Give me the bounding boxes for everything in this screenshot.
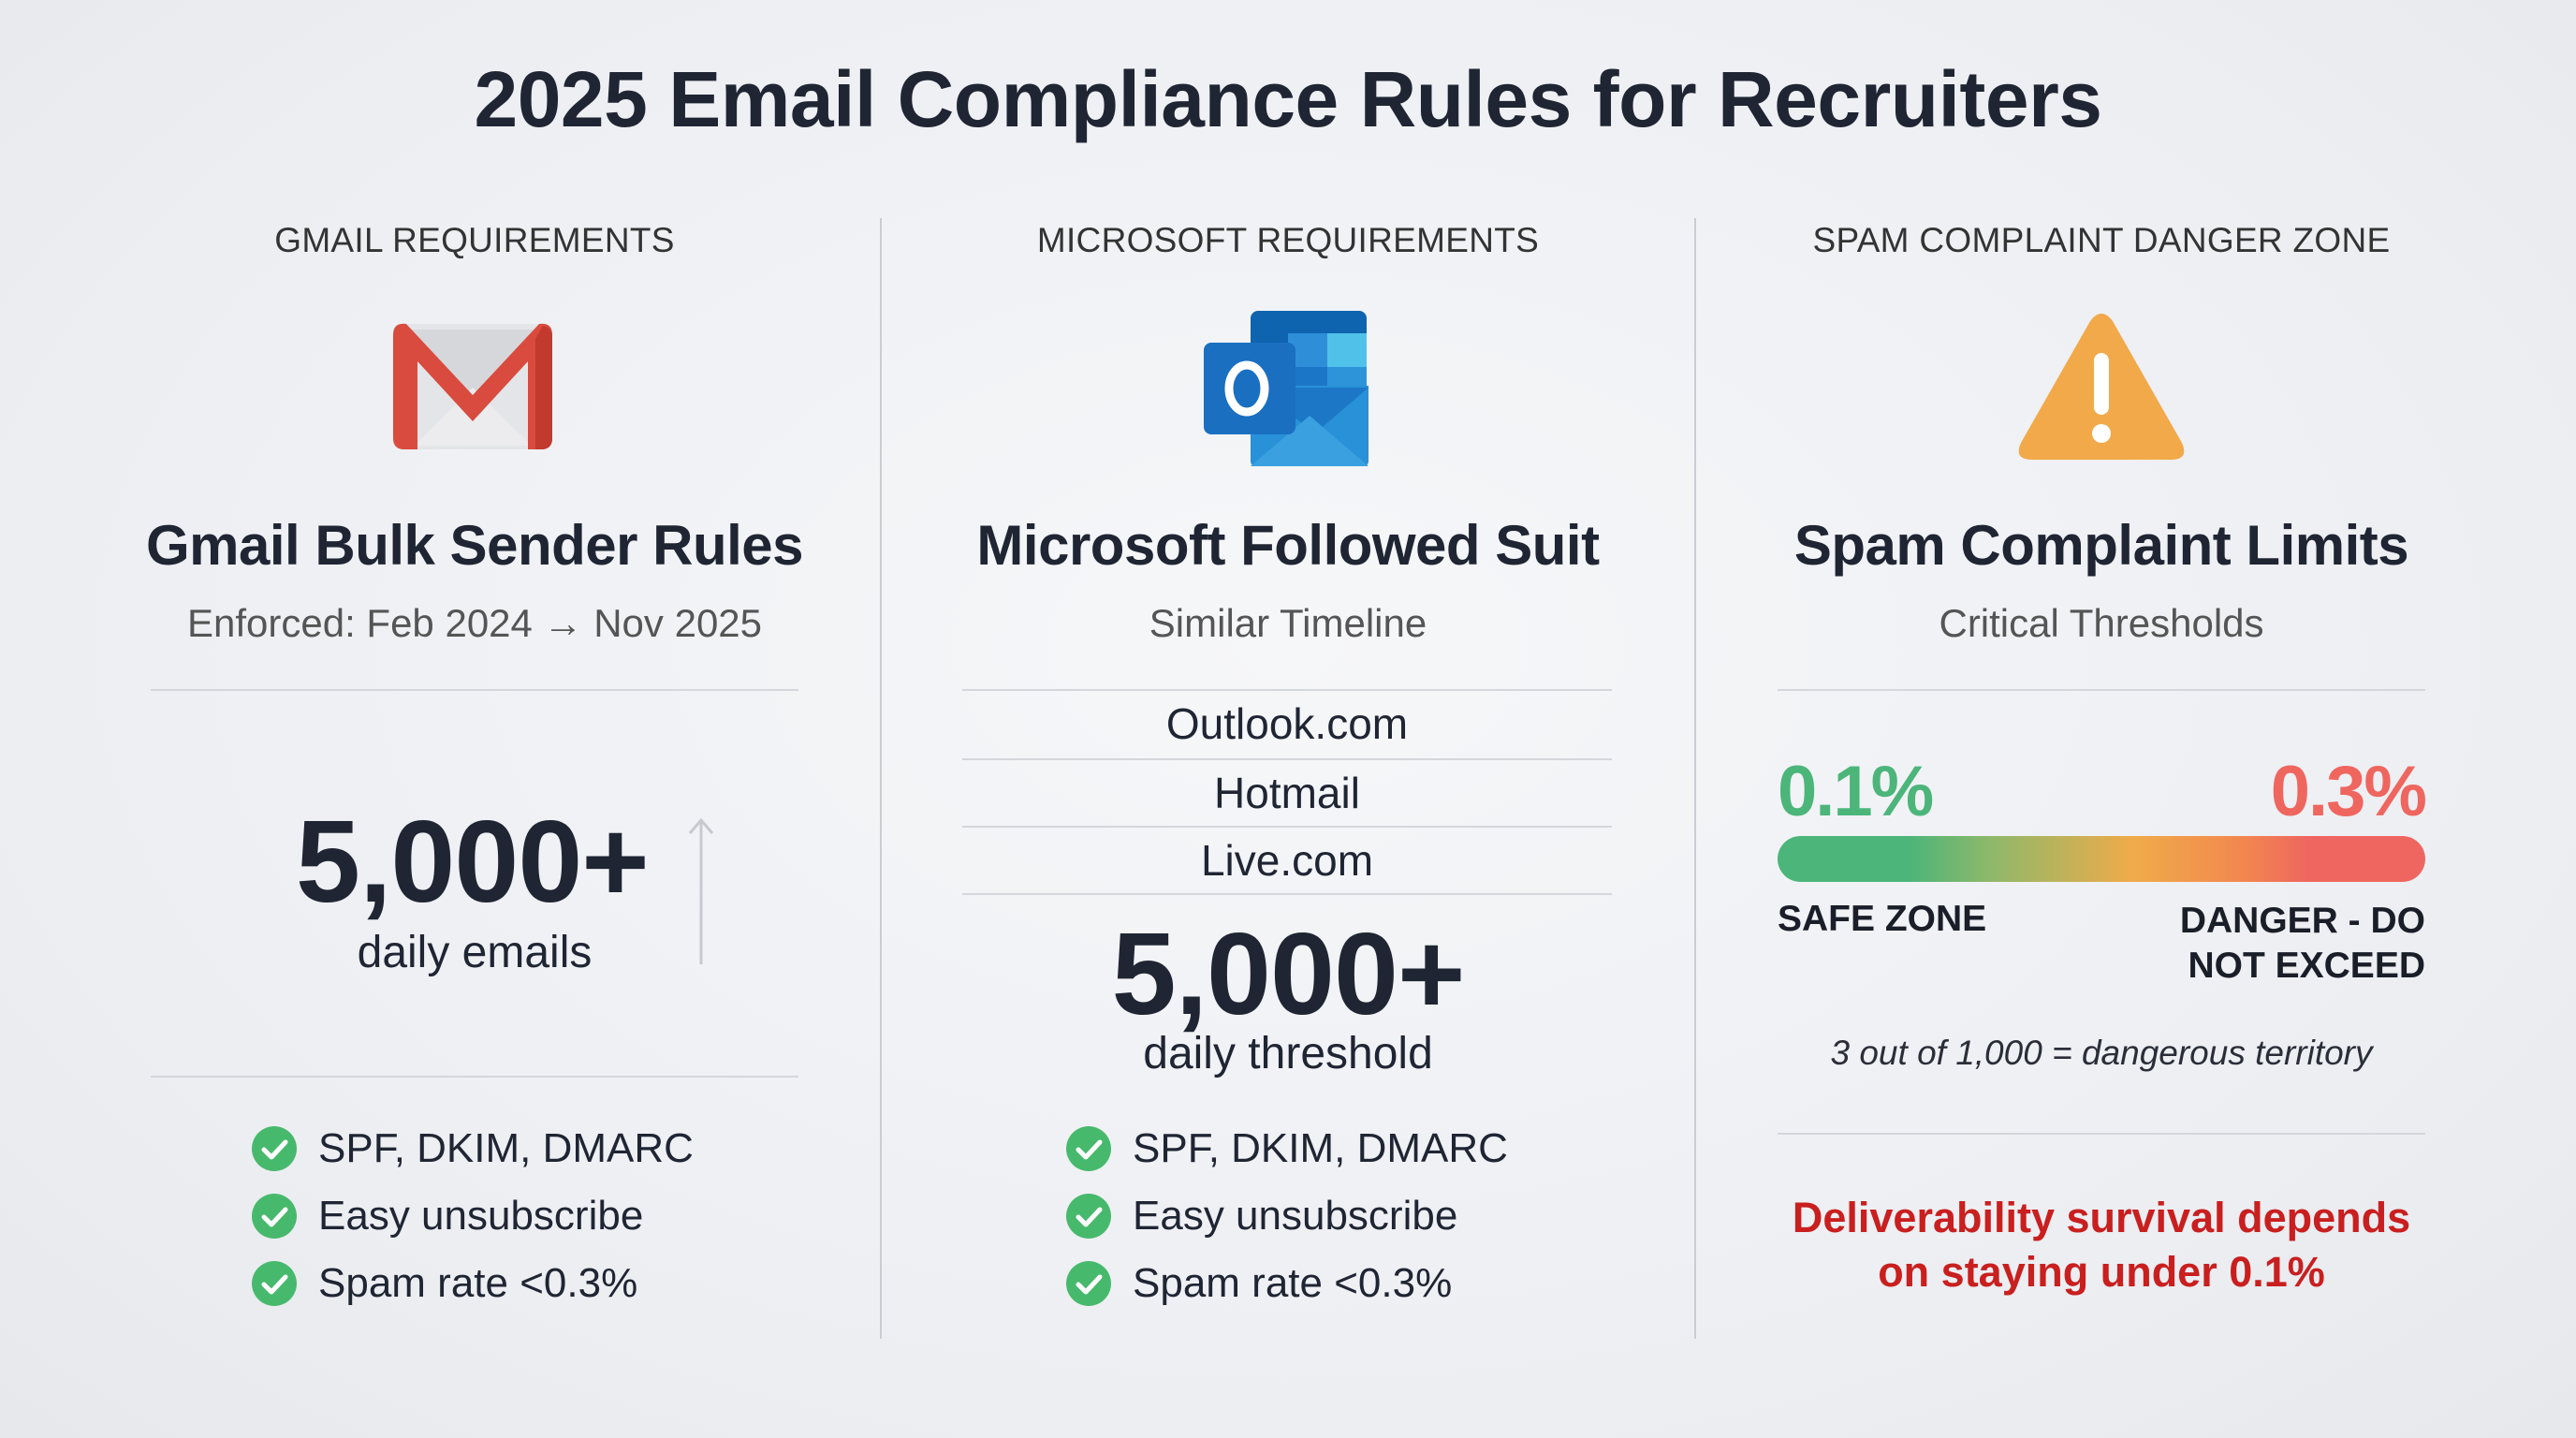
note: dangerous territory: 3 out of 1,000 = dangerous territory — [1830, 1034, 2373, 1072]
panel: microsoft — [962, 221, 1612, 1306]
stat: 5000+ daily threshold: daily threshold — [1143, 1029, 1433, 1078]
stat: 5000+ daily threshold: 5,000+ — [1112, 910, 1464, 1039]
panel: spam danger zone — [1778, 221, 2425, 1296]
subheading: gmail: Enforced: Feb 2024 → Nov 2025 — [187, 601, 762, 645]
icon: warning — [2018, 314, 2185, 460]
gauge: threshold bar: 0.3% — [2271, 752, 2425, 831]
divider: left — [880, 218, 882, 1339]
list: domains: Live.com — [1201, 836, 1373, 885]
gauge: threshold bar: 0.1% — [1778, 752, 1932, 831]
checklist: gmail: Spam rate <0.3% — [318, 1260, 637, 1306]
subheading: microsoft: Similar Timeline — [1149, 601, 1427, 645]
callout: deliverability: on staying under 0.1% — [1878, 1248, 2325, 1296]
gauge: threshold bar: NOT EXCEED — [2188, 946, 2425, 986]
section label: microsoft: MICROSOFT REQUIREMENTS — [1037, 221, 1539, 259]
title: 2025 Email Compliance Rules for Recruiters — [474, 55, 2102, 143]
checklist: gmail: Easy unsubscribe — [318, 1193, 643, 1239]
stat: 5000+ daily emails: 5,000+ — [296, 798, 649, 927]
list: domains — [962, 689, 1612, 895]
checklist: gmail: SPF, DKIM, DMARC — [318, 1125, 694, 1171]
divider: right — [1694, 218, 1696, 1339]
checklist: microsoft: SPF, DKIM, DMARC — [1133, 1125, 1508, 1171]
heading: spam: Spam Complaint Limits — [1794, 514, 2408, 577]
callout: deliverability: Deliverability survival depends — [1793, 1194, 2410, 1241]
subheading: spam: Critical Thresholds — [1939, 601, 2264, 645]
gauge: threshold bar: SAFE ZONE — [1778, 899, 1986, 939]
list: domains: Hotmail — [1214, 769, 1360, 817]
icon: gmail — [393, 324, 552, 449]
gauge: threshold bar — [1778, 752, 2425, 986]
stat: 5000+ daily emails: daily emails — [358, 928, 592, 977]
section label: spam: SPAM COMPLAINT DANGER ZONE — [1812, 221, 2391, 259]
icon: outlook — [1204, 311, 1368, 466]
section label: gmail: GMAIL REQUIREMENTS — [274, 221, 675, 259]
gauge: threshold bar: DANGER - DO — [2180, 901, 2425, 941]
panel: gmail — [146, 221, 803, 1306]
icon: up arrow — [689, 818, 713, 964]
heading: microsoft: Microsoft Followed Suit — [976, 514, 1600, 577]
callout: deliverability — [1793, 1194, 2410, 1296]
heading: gmail: Gmail Bulk Sender Rules — [146, 514, 803, 577]
checklist: gmail — [252, 1125, 694, 1306]
checklist: microsoft: Spam rate <0.3% — [1133, 1260, 1452, 1306]
checklist: microsoft — [1066, 1125, 1508, 1306]
stat: 5000+ daily emails — [296, 798, 713, 977]
list: domains: Outlook.com — [1166, 699, 1408, 748]
checklist: microsoft: Easy unsubscribe — [1133, 1193, 1457, 1239]
